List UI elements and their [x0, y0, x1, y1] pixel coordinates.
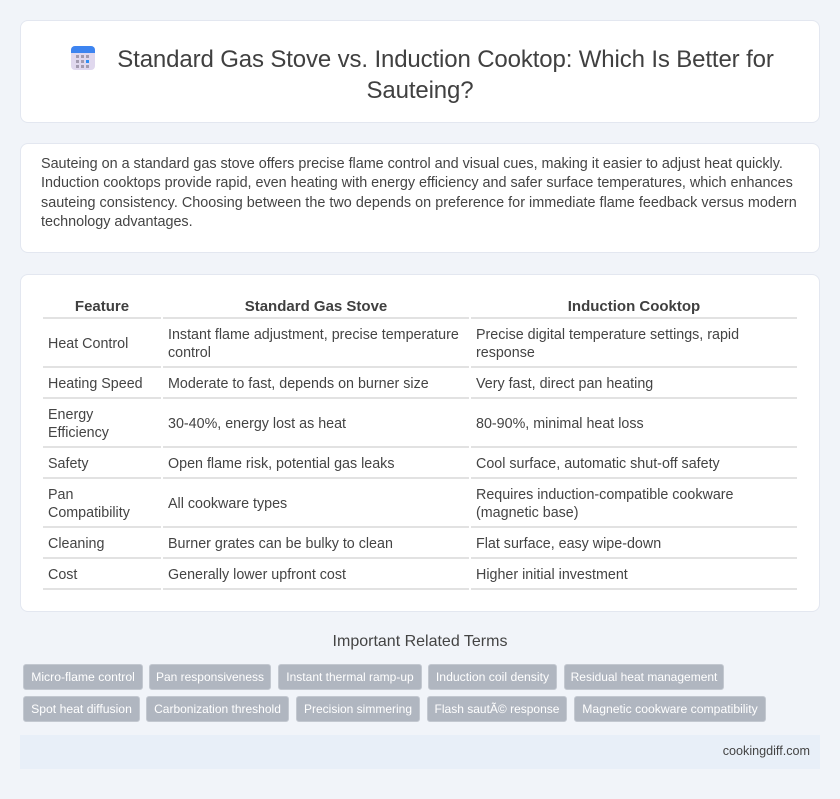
gas: pan compatibility: All cookware types [168, 496, 287, 512]
gas: cleaning: Burner grates can be bulky to clean [168, 536, 393, 552]
tag: Carbonization threshold [154, 702, 281, 716]
tag: Pan responsiveness [156, 670, 264, 684]
tag: Instant thermal ramp-up [286, 670, 414, 684]
induction: heat control [476, 327, 739, 361]
gas: heating speed: Moderate to fast, depends on burner size [168, 376, 429, 392]
panel: title header [20, 20, 820, 123]
tag: Induction coil density [436, 670, 549, 684]
induction: pan compatibility: (magnetic base) [476, 505, 579, 521]
gas: cost: Generally lower upfront cost [168, 567, 346, 583]
tag: Magnetic cookware compatibility [582, 702, 758, 716]
gas: safety: Open flame risk, potential gas leaks [168, 456, 394, 472]
row: energy efficiency: Energy [48, 407, 93, 423]
intro text [41, 156, 797, 230]
title: Sauteing? [367, 77, 473, 104]
induction: cleaning: Flat surface, easy wipe-down [476, 536, 661, 552]
table header: induction cooktop: Induction Cooktop [568, 298, 700, 315]
panel: introduction [20, 143, 820, 253]
intro text: Induction cooktops provide rapid, even heating with energy efficiency and safer surface temperatures, which enhances [41, 175, 793, 191]
tag: Precision simmering [304, 702, 412, 716]
title: Standard Gas Stove vs. Induction Cooktop: Which Is Better for [117, 46, 774, 73]
tag [23, 664, 143, 690]
induction: pan compatibility: Requires induction-compatible cookware [476, 487, 733, 503]
row: heat control: Heat Control [48, 336, 128, 352]
tag [23, 696, 140, 722]
row: cost: Cost [48, 567, 77, 583]
panel: comparison table [20, 274, 820, 612]
tag [278, 664, 422, 690]
induction: heat control: Precise digital temperature settings, rapid [476, 327, 739, 343]
tag: Spot heat diffusion [31, 702, 132, 716]
row: pan compatibility: Compatibility [48, 505, 130, 521]
gas: heat control: Instant flame adjustment, precise temperature [168, 327, 459, 343]
table header: feature: Feature [75, 298, 129, 315]
gas: heat control: control [168, 345, 211, 361]
row: pan compatibility [48, 487, 130, 521]
footer source text: cookingdiff.com [723, 744, 810, 758]
table header: standard gas stove: Standard Gas Stove [245, 298, 387, 315]
row: cleaning: Cleaning [48, 536, 104, 552]
gas: heat control [168, 327, 459, 361]
row: heating speed: Heating Speed [48, 376, 143, 392]
tag: Residual heat management [571, 670, 717, 684]
heading: important related terms: Important Related Terms [333, 633, 507, 650]
induction: heating speed: Very fast, direct pan heating [476, 376, 653, 392]
tag [149, 664, 271, 690]
tag: Flash sautÃ© response [435, 702, 559, 716]
row: safety: Safety [48, 456, 89, 472]
induction: cost: Higher initial investment [476, 567, 628, 583]
tag [296, 696, 420, 722]
title [117, 46, 774, 104]
footer [20, 735, 820, 769]
tag: Micro-flame control [31, 670, 135, 684]
tag [564, 664, 724, 690]
induction: heat control: response [476, 345, 535, 361]
tag [146, 696, 289, 722]
row: energy efficiency [48, 407, 109, 441]
induction: energy efficiency: 80-90%, minimal heat loss [476, 416, 644, 432]
induction: safety: Cool surface, automatic shut-off safety [476, 456, 720, 472]
row: pan compatibility: Pan [48, 487, 73, 503]
tag group: related terms [23, 664, 766, 722]
tag [428, 664, 557, 690]
intro text: sauteing consistency. Choosing between the two depends on preference for immediate flame feedback versus modern [41, 194, 797, 210]
intro text: Sauteing on a standard gas stove offers precise flame control and visual cues, making it easier to adjust heat quickly. [41, 156, 783, 172]
gas: energy efficiency: 30-40%, energy lost as heat [168, 416, 346, 432]
icon: calendar app [71, 46, 95, 70]
tag [574, 696, 766, 722]
intro text: technology advantages. [41, 214, 193, 230]
row: energy efficiency: Efficiency [48, 425, 109, 441]
induction: pan compatibility [476, 487, 733, 521]
tag [427, 696, 567, 722]
